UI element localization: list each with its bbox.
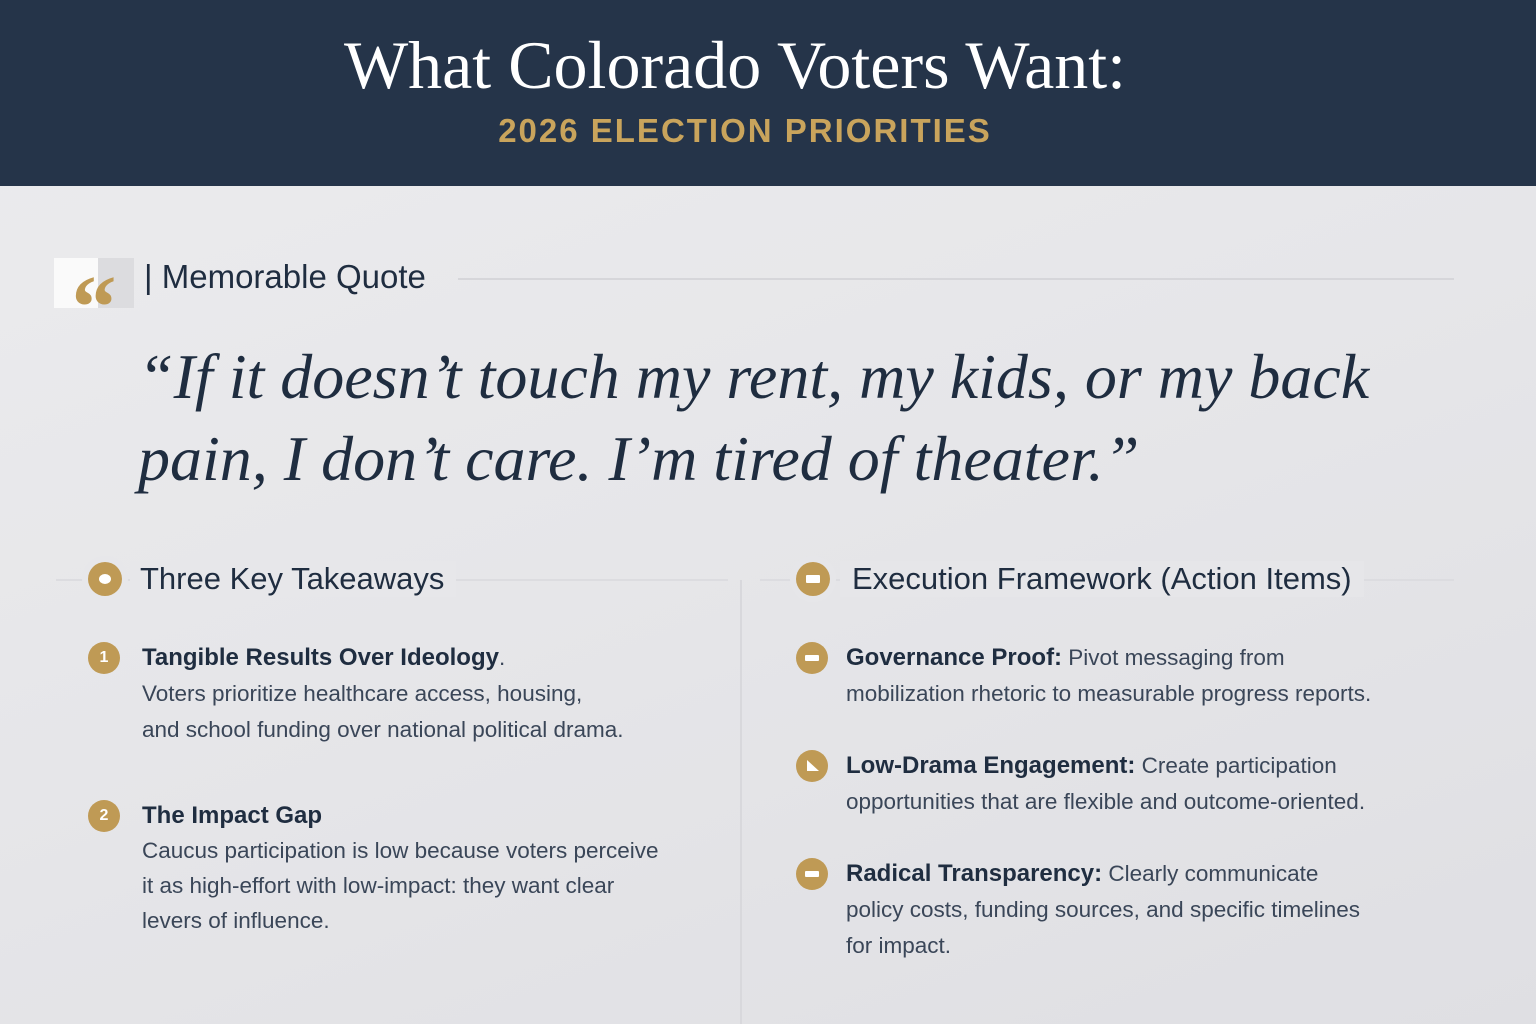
action 1 [796, 642, 1371, 706]
quote text: pain, I don’t care. I’m tired of theater.” [138, 423, 1139, 494]
panel: execution framework: for impact. [846, 933, 951, 958]
panel: three key takeaways: Voters prioritize healthcare access, housing, [142, 681, 582, 706]
panel: three key takeaways: 2 [100, 807, 108, 824]
panel: three key takeaways: levers of influence. [142, 908, 330, 933]
action 2 [796, 750, 1365, 814]
item 2 [88, 800, 659, 933]
panel: three key takeaways: Tangible Results Over Ideology. [142, 644, 505, 671]
icon: quote marks [54, 258, 134, 308]
panel: three key takeaways: and school funding over national political drama. [142, 717, 624, 742]
panel: three key takeaways: 1 [100, 649, 108, 666]
memorable quote heading: | Memorable Quote [144, 258, 426, 295]
panel: three key takeaways: Caucus participation is low because voters perceive [142, 838, 659, 863]
panel: three key takeaways: The Impact Gap [142, 802, 322, 829]
memorable quote heading [54, 258, 1454, 357]
panel: execution framework [760, 561, 1371, 958]
quote text [134, 341, 1370, 494]
panel: three key takeaways [56, 561, 728, 933]
panel: execution framework: Governance Proof: Pivot messaging from [846, 644, 1285, 671]
title: What Colorado Voters Want: [344, 27, 1126, 103]
heading: takeaways [56, 561, 728, 596]
item 1 [88, 642, 624, 742]
action 3 [796, 858, 1360, 958]
header band [0, 0, 1536, 186]
panel: execution framework: Radical Transparency: Clearly communicate [846, 860, 1318, 887]
heading: takeaways: Three Key Takeaways [140, 561, 444, 596]
panel: execution framework: mobilization rhetoric to measurable progress reports. [846, 681, 1371, 706]
panel: execution framework: opportunities that are flexible and outcome-oriented. [846, 789, 1365, 814]
panel: execution framework: policy costs, funding sources, and specific timelines [846, 897, 1360, 922]
subtitle: 2026 ELECTION PRIORITIES [498, 112, 992, 149]
panel: three key takeaways: it as high-effort with low-impact: they want clear [142, 873, 614, 898]
panel: execution framework: Low-Drama Engagement: Create participation [846, 752, 1337, 779]
icon: quote marks: “ [72, 258, 116, 357]
heading: execution: Execution Framework (Action Items) [852, 561, 1352, 596]
quote text: “If it doesn’t touch my rent, my kids, or my back [138, 341, 1369, 412]
